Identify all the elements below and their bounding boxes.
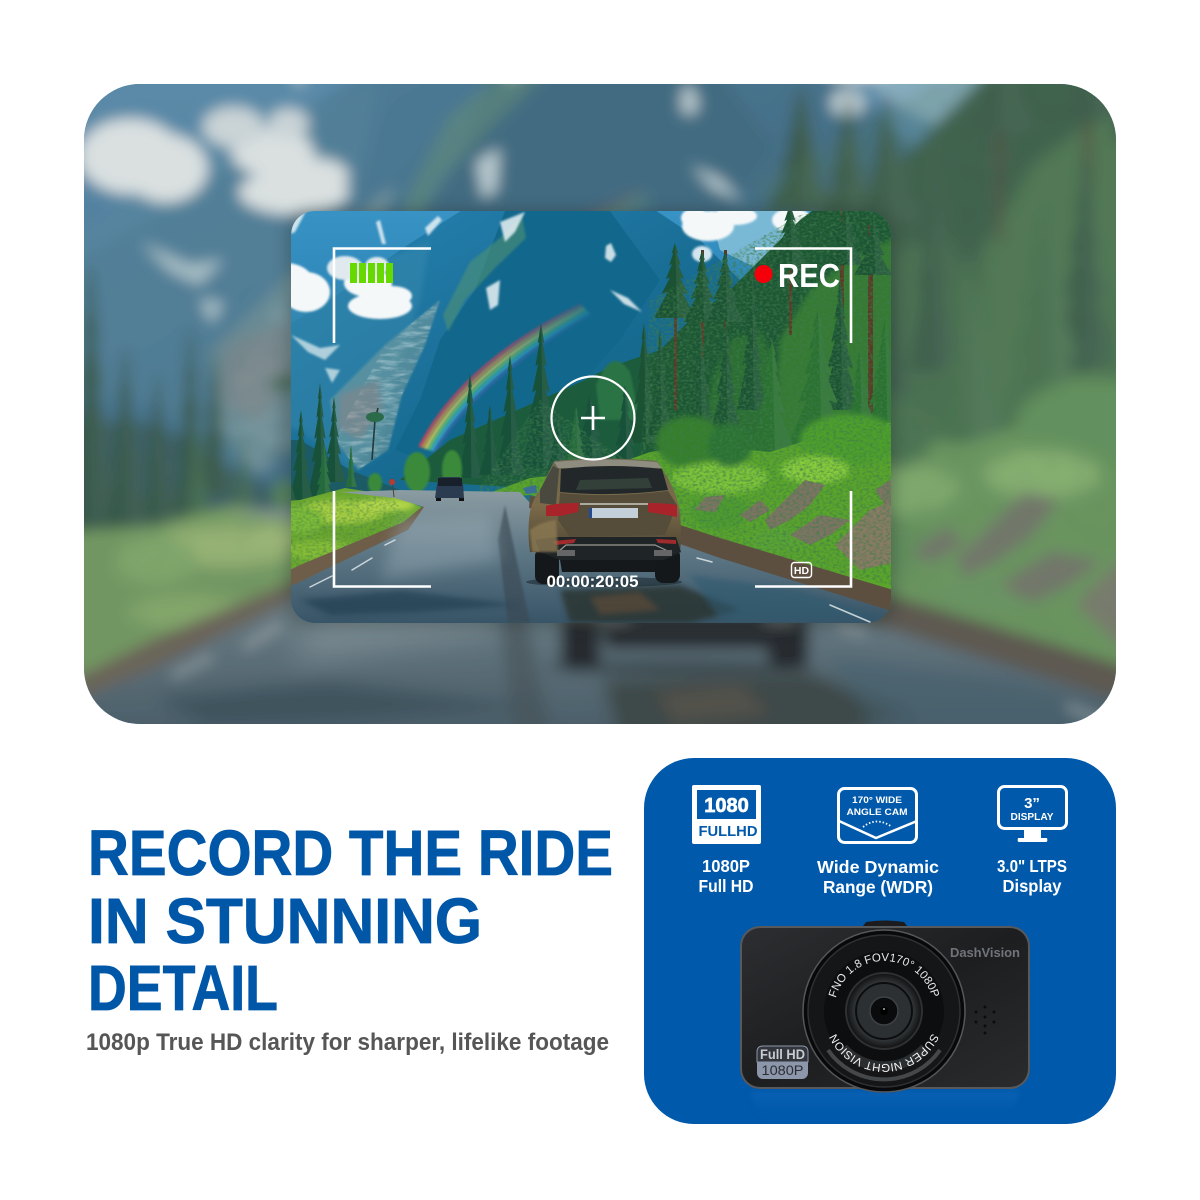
Full HD badge — [757, 1046, 808, 1079]
recording indicator: REC — [778, 257, 840, 294]
label: Wide Dynamic Range — [817, 857, 939, 897]
label: LTPS display: Display — [1002, 876, 1062, 896]
icon: battery level — [350, 263, 393, 283]
heading: RECORD THE RIDE — [88, 817, 613, 889]
icon: 170 degree wide angle: 170° WIDE — [852, 795, 902, 806]
camera body — [740, 926, 1030, 1089]
icon: 3 inch display: 3” — [1024, 795, 1040, 812]
panel: product features — [644, 758, 1116, 1124]
label: 1080P Full HD: 1080P — [702, 856, 750, 876]
subheading: 1080p True HD clarity for sharper, lifelike footage — [86, 1029, 609, 1056]
speaker grille — [974, 1006, 996, 1034]
label: LTPS display: 3.0" LTPS — [997, 856, 1067, 876]
icon: 3 inch display — [998, 786, 1066, 842]
icon: focus reticle — [552, 376, 634, 460]
camera lens: SUPER NIGHT VISION — [829, 1034, 938, 1072]
viewfinder photo: mountain road scene — [291, 211, 891, 623]
panel: dash cam viewfinder — [280, 200, 902, 632]
label: LTPS display — [997, 856, 1067, 896]
timecode: 00:00:20:05 — [546, 573, 638, 591]
icon: 170 degree wide angle — [838, 788, 917, 842]
heading: IN STUNNING — [88, 885, 482, 957]
viewfinder corner brackets — [334, 248, 851, 586]
camera top button — [860, 920, 910, 930]
label: 1080P Full HD — [698, 856, 754, 896]
icon: 1080 Full HD — [692, 785, 761, 844]
camera lens — [802, 929, 966, 1093]
icon: 3 inch display: DISPLAY — [1010, 812, 1054, 823]
camera reflection — [750, 1092, 1020, 1122]
Full HD badge: Full HD — [760, 1046, 805, 1062]
icon: 1080 Full HD: 1080 — [704, 795, 749, 817]
label: Wide Dynamic Range: Range (WDR) — [823, 877, 933, 897]
dash cam product photo — [740, 920, 1030, 1093]
heading — [88, 817, 613, 1024]
label: 1080P Full HD: Full HD — [698, 876, 754, 896]
icon: HD badge: HD — [794, 565, 809, 577]
panel: blurred scenic background — [84, 84, 1116, 724]
brand name: DashVision — [950, 945, 1020, 960]
icon: HD badge — [792, 562, 812, 578]
Full HD badge: 1080P — [762, 1062, 804, 1078]
camera lens: FNO 1.8 FOV170° 1080P — [828, 953, 939, 998]
heading: DETAIL — [88, 952, 278, 1024]
icon: 1080 Full HD: FULLHD — [698, 824, 758, 840]
icon: 170 degree wide angle: ANGLE CAM — [846, 807, 908, 818]
recording indicator — [754, 257, 840, 294]
label: Wide Dynamic Range: Wide Dynamic — [817, 857, 939, 877]
